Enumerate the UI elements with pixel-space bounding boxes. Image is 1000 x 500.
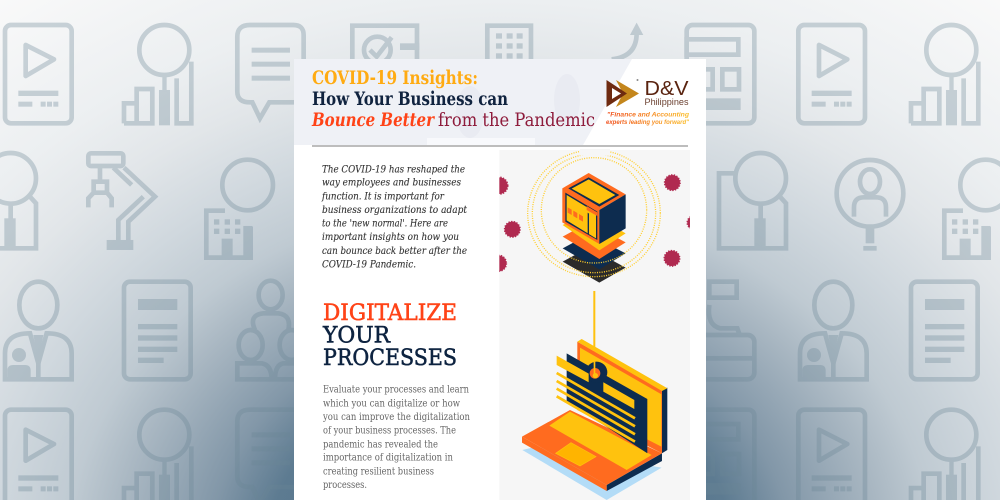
icon: service desk (680, 282, 754, 379)
intro text: to the 'new normal'. Here are (322, 218, 448, 230)
section heading: PROCESSES (323, 345, 457, 371)
icon: report document, right (911, 282, 978, 379)
icon: video document, top left (5, 25, 72, 123)
logo wordmark: Philippines (644, 97, 689, 107)
body text: importance of digitalization in (323, 452, 453, 464)
body text (322, 384, 470, 491)
icon: speech bubble, bottom (237, 410, 304, 500)
logo wordmark: D&V (644, 78, 689, 100)
logo: D&V Philippines (606, 78, 689, 126)
title: Bounce Better (311, 109, 436, 131)
section heading: YOUR (322, 322, 391, 348)
icon: magnifier document, right (719, 153, 786, 250)
icon: magnifier person (837, 160, 903, 251)
logo wordmark (644, 78, 689, 107)
connector line (593, 291, 595, 371)
virus particles (490, 175, 701, 271)
illustration panel (490, 149, 701, 500)
intro text: way employees and businesses (322, 177, 462, 189)
icon: robot arm (88, 153, 155, 250)
intro text: The COVID-19 has reshaped the (322, 163, 465, 175)
icon: magnifier building, right (944, 160, 1000, 259)
icon: video document, bottom left (5, 410, 72, 500)
body text: of your business processes. The (323, 425, 456, 437)
icon: layout document, top (687, 25, 754, 123)
intro text: COVID-19 Pandemic. (322, 258, 416, 270)
icon: laptop with dashboard (522, 339, 667, 500)
logo tagline: "Finance and Accounting (607, 112, 689, 118)
icon: report document, left (124, 282, 191, 379)
body text: which you can digitalize or how (323, 397, 460, 409)
icon: speech bubble, top (237, 25, 304, 118)
section heading: DIGITALIZE (323, 300, 457, 326)
icon: magnifier chart, bottom (124, 410, 191, 500)
icon: magnifier chart, bottom right (911, 410, 978, 500)
title: COVID-19 Insights: (312, 67, 478, 89)
icon: video document, bottom right (798, 410, 865, 500)
title: from the Pandemic (438, 109, 595, 131)
icon: logo arrows (606, 79, 639, 107)
title (311, 67, 595, 131)
logo tagline: experts leading you forward" (606, 120, 689, 126)
panel: infographic card (294, 59, 706, 500)
icon: server cube with layers (562, 173, 626, 283)
logo tagline (606, 112, 689, 126)
icon: business person, left (5, 282, 72, 381)
header banner (294, 59, 632, 145)
icon: magnifier building, left (206, 160, 273, 259)
icon: business person, right (800, 282, 867, 381)
title: How Your Business can (312, 88, 508, 110)
intro text: can bounce back better after the (322, 245, 467, 257)
section heading (322, 300, 457, 371)
icon: magnifier chart, top right (911, 25, 978, 125)
intro text: business organizations to adapt (322, 204, 468, 216)
body text: pandemic has revealed the (323, 438, 438, 450)
icon: layout document, bottom (687, 410, 754, 500)
icon: checklist (352, 26, 419, 67)
body text: creating resilient business (323, 466, 434, 478)
body text: you can improve the digitalization (322, 411, 470, 423)
icon: growth arrow (612, 23, 643, 59)
icon: video document, top right (798, 25, 865, 123)
icon: group of people (237, 281, 310, 379)
icon: office building (487, 26, 531, 67)
body text: processes. (323, 479, 367, 491)
icon: magnifier chart, top (124, 25, 191, 125)
body text: Evaluate your processes and learn (323, 384, 469, 396)
header rule (312, 145, 688, 147)
intro text: important insights on how you (322, 231, 459, 243)
signal rings (528, 149, 660, 277)
icon: magnifier document, left (0, 153, 36, 250)
intro text: function. It is important for (321, 190, 445, 202)
intro text (321, 163, 468, 270)
